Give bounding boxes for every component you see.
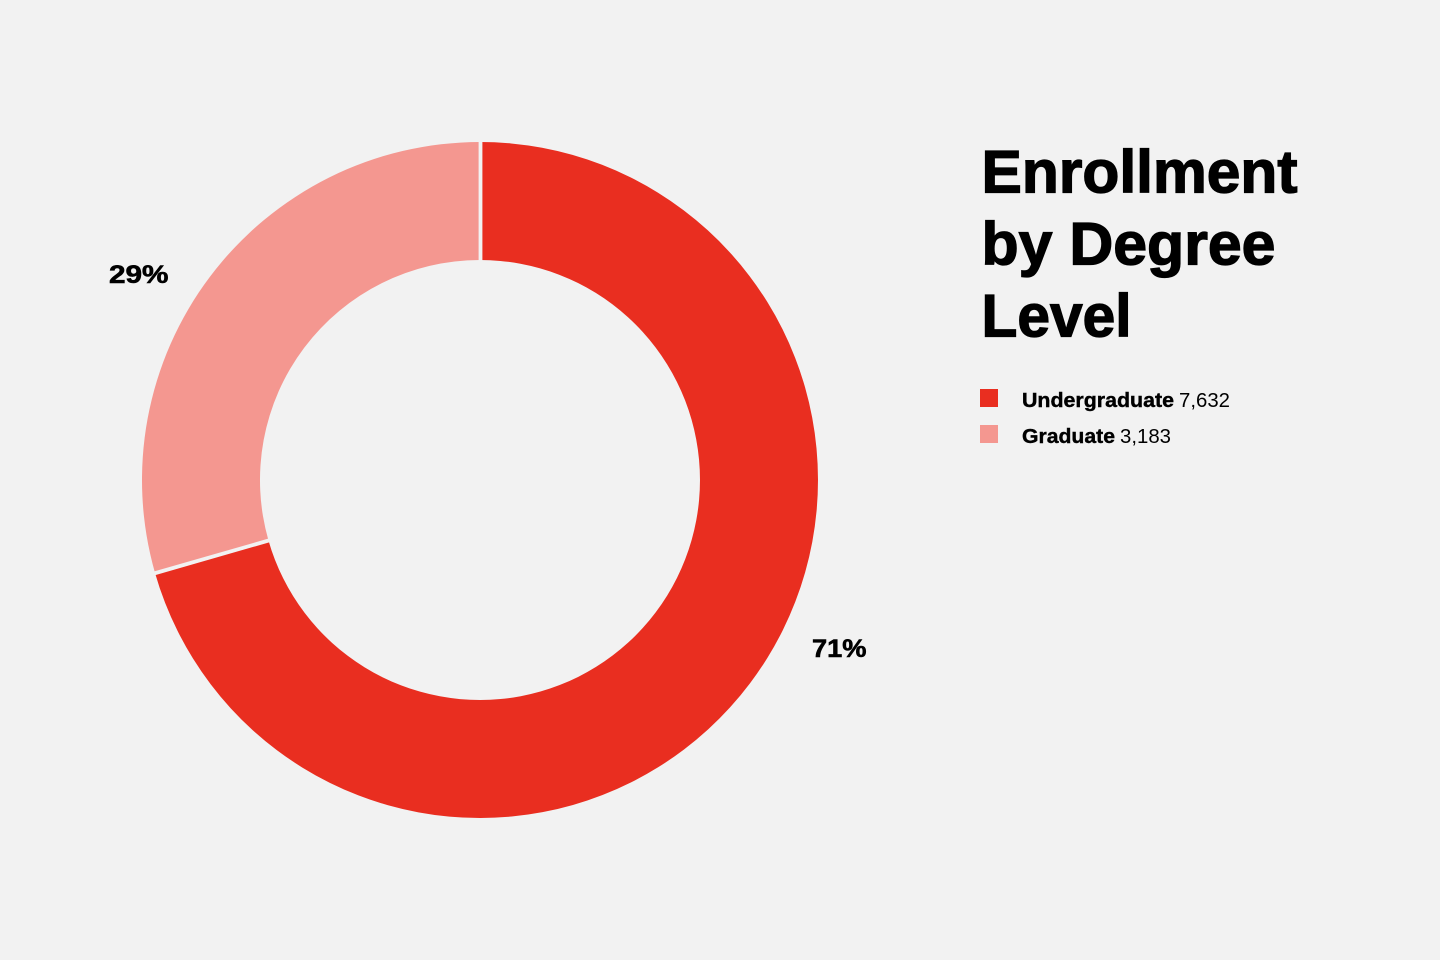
legend item: undergraduate: 7,632 <box>1179 390 1230 412</box>
title: Level <box>982 282 1132 349</box>
title: by Degree <box>982 210 1276 277</box>
segment: undergraduate 71% <box>155 142 818 818</box>
legend item: graduate: Graduate <box>1022 426 1115 448</box>
legend item: graduate: 3,183 <box>1120 426 1171 448</box>
data label: 71%: 71% <box>812 635 866 663</box>
legend item: graduate <box>980 425 1171 448</box>
legend <box>980 389 1230 448</box>
data label: 29%: 29% <box>109 261 168 289</box>
legend item: undergraduate <box>980 389 1230 412</box>
segment: graduate 29% <box>142 142 480 573</box>
title: Enrollment <box>982 138 1298 205</box>
donut chart <box>142 139 818 818</box>
title <box>982 138 1298 349</box>
legend item: undergraduate: Undergraduate <box>1022 390 1174 412</box>
